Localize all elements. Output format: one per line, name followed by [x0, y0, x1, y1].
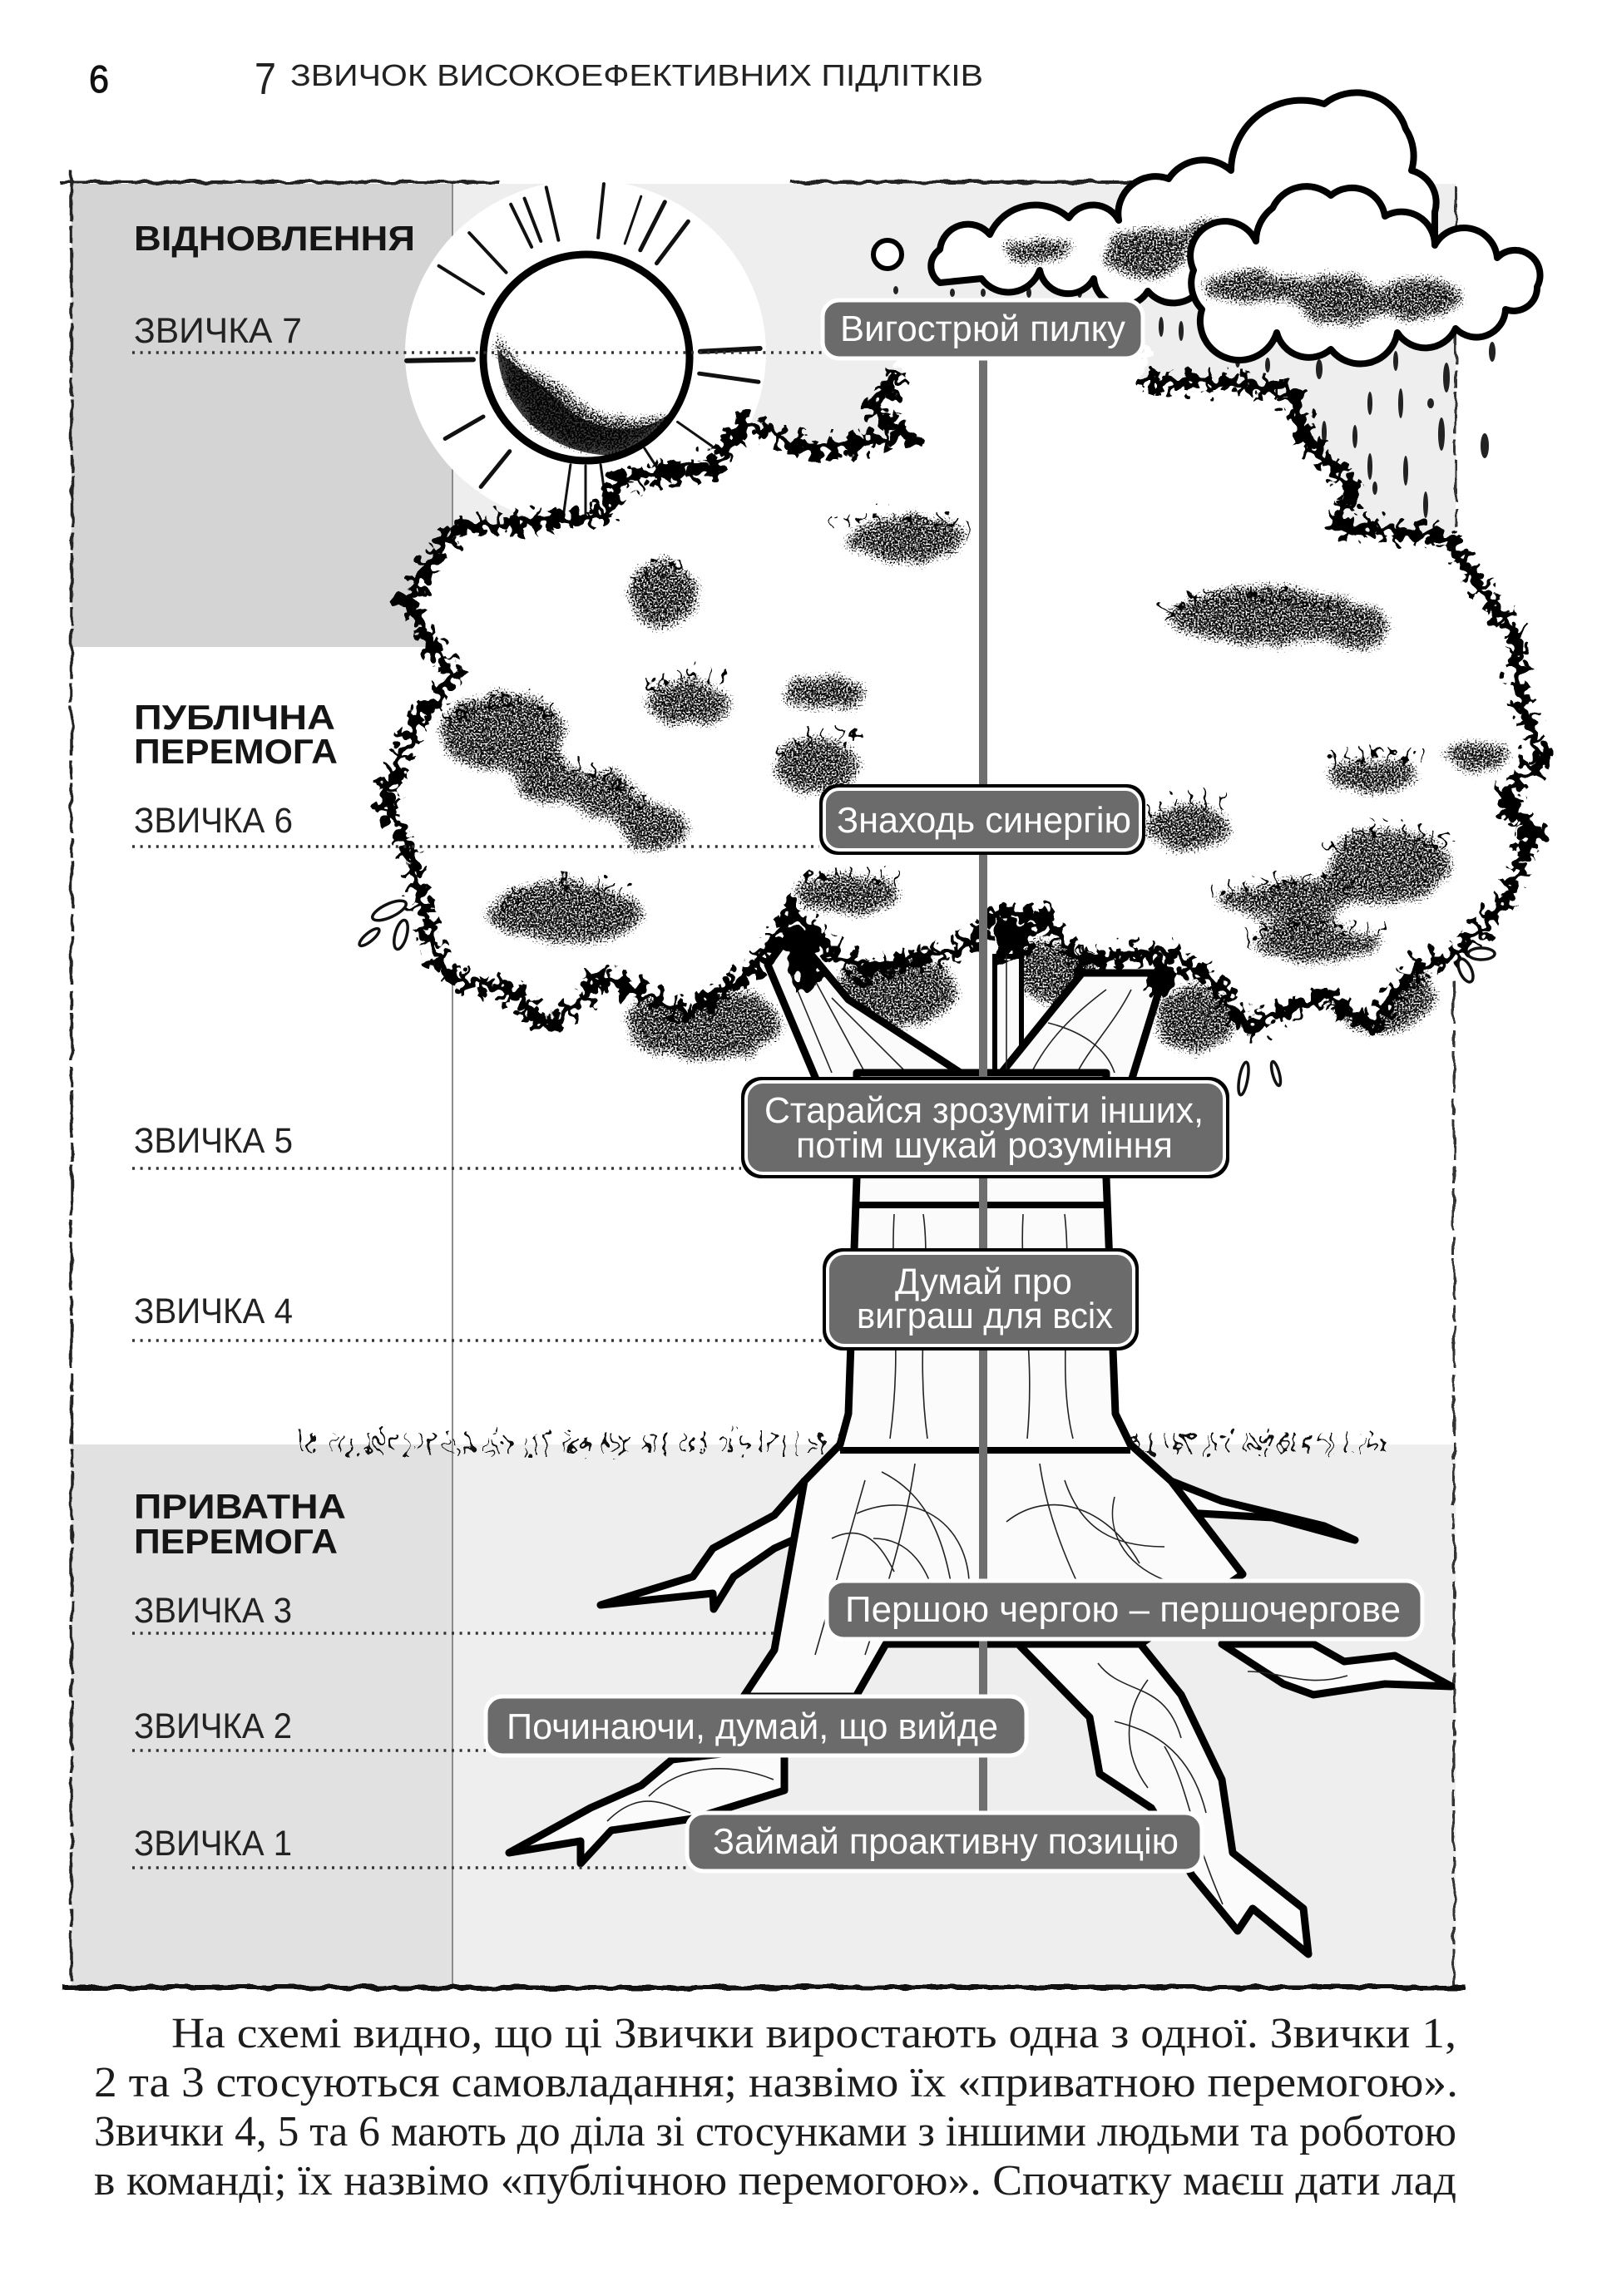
dotted leader: habit 1	[132, 1866, 687, 1869]
pill: habit 4: Думай про	[895, 1262, 1072, 1302]
dotted leader: habit 5	[132, 1167, 741, 1170]
label: habit 5: ЗВИЧКА 5	[134, 1121, 293, 1161]
page number: 6	[89, 57, 109, 101]
label: habit 3: ЗВИЧКА 3	[134, 1591, 292, 1631]
pill: habit 5: Старайся зрозуміти інших,	[764, 1090, 1204, 1131]
root: far right	[1222, 1644, 1451, 1695]
pill: habit 1	[687, 1813, 1202, 1871]
pill: habit 4	[823, 1248, 1139, 1350]
heading: private victory	[134, 1487, 346, 1561]
canopy hatch marks	[449, 517, 1456, 936]
pill: habit 2	[486, 1696, 1026, 1755]
pill: habit 6	[819, 784, 1145, 855]
trunk rings	[840, 1205, 1130, 1450]
tree branches	[768, 931, 1164, 1081]
central stem line	[979, 358, 987, 1813]
heading: public victory	[134, 698, 338, 771]
pill: habit 5: потім шукай розуміння	[796, 1125, 1173, 1166]
pill: habit 5	[741, 1077, 1229, 1178]
body paragraph	[94, 2010, 1458, 2205]
dotted leader: habit 2	[132, 1749, 486, 1752]
label: habit 7: ЗВИЧКА 7	[134, 311, 302, 351]
dotted leader: habit 3	[132, 1632, 778, 1635]
dotted leader: habit 4	[132, 1339, 826, 1342]
pill: habit 7	[823, 300, 1143, 358]
pill: habit 6: Знаходь синергію	[837, 800, 1131, 841]
canopy shading	[432, 507, 1520, 969]
icon: falling leaves	[357, 896, 1495, 1096]
root: upper right	[1171, 1481, 1355, 1574]
pill: habit 3	[827, 1581, 1422, 1639]
heading: private victory: ПРИВАТНА	[134, 1487, 346, 1526]
heading: public victory: ПЕРЕМОГА	[134, 732, 338, 771]
body paragraph: 2 та 3 стосуються самовладання; назвімо їх «приватною перемогою».	[94, 2059, 1458, 2106]
running header: 7	[255, 54, 276, 104]
heading: public victory: ПУБЛІЧНА	[134, 698, 335, 737]
grass	[299, 1434, 1397, 1453]
label: habit 1: ЗВИЧКА 1	[134, 1824, 292, 1864]
tree canopy	[385, 349, 1542, 1028]
pill: habit 7: Вигострюй пилку	[840, 309, 1125, 349]
label: habit 4: ЗВИЧКА 4	[134, 1291, 293, 1331]
root: lower right	[1018, 1644, 1308, 1954]
root: lower left	[509, 1746, 784, 1864]
trunk	[744, 1073, 1243, 1696]
pill: habit 1: Займай проактивну позицію	[713, 1821, 1179, 1862]
bark cracks	[607, 1214, 1347, 1904]
root: upper left	[601, 1481, 835, 1609]
running header	[255, 54, 983, 104]
body paragraph: На схемі видно, що ці Звички виростають одна з одної. Звички 1,	[171, 2010, 1456, 2057]
tree roots and trunk	[509, 1073, 1451, 1954]
running header: ЗВИЧОК ВИСОКОЕФЕКТИВНИХ ПІДЛІТКІВ	[290, 58, 983, 92]
heading: renewal: ВІДНОВЛЕННЯ	[134, 219, 415, 258]
icon: sun	[405, 180, 766, 526]
pill: habit 4: виграш для всіх	[857, 1296, 1113, 1336]
body paragraph: в команді; їх назвімо «публічною перемогою». Спочатку маєш дати лад	[94, 2157, 1456, 2205]
frame: rough borders	[60, 170, 1466, 1992]
pill: habit 3: Першою чергою – першочергове	[845, 1589, 1401, 1630]
panel: diagram background	[72, 184, 1456, 1987]
shading behind the canopy	[616, 931, 1443, 1069]
body paragraph: Звички 4, 5 та 6 мають до діла зі стосунками з іншими людьми та роботою	[94, 2108, 1456, 2155]
icon: clouds	[873, 92, 1540, 364]
label: habit 2: ЗВИЧКА 2	[134, 1706, 292, 1746]
dotted leader: habit 6	[132, 845, 819, 848]
heading: private victory: ПЕРЕМОГА	[134, 1522, 338, 1561]
icon: rain drops	[893, 286, 1496, 518]
label: habit 6: ЗВИЧКА 6	[134, 801, 293, 841]
dotted leader: habit 7	[132, 351, 823, 354]
pill: habit 2: Починаючи, думай, що вийде	[507, 1706, 998, 1747]
